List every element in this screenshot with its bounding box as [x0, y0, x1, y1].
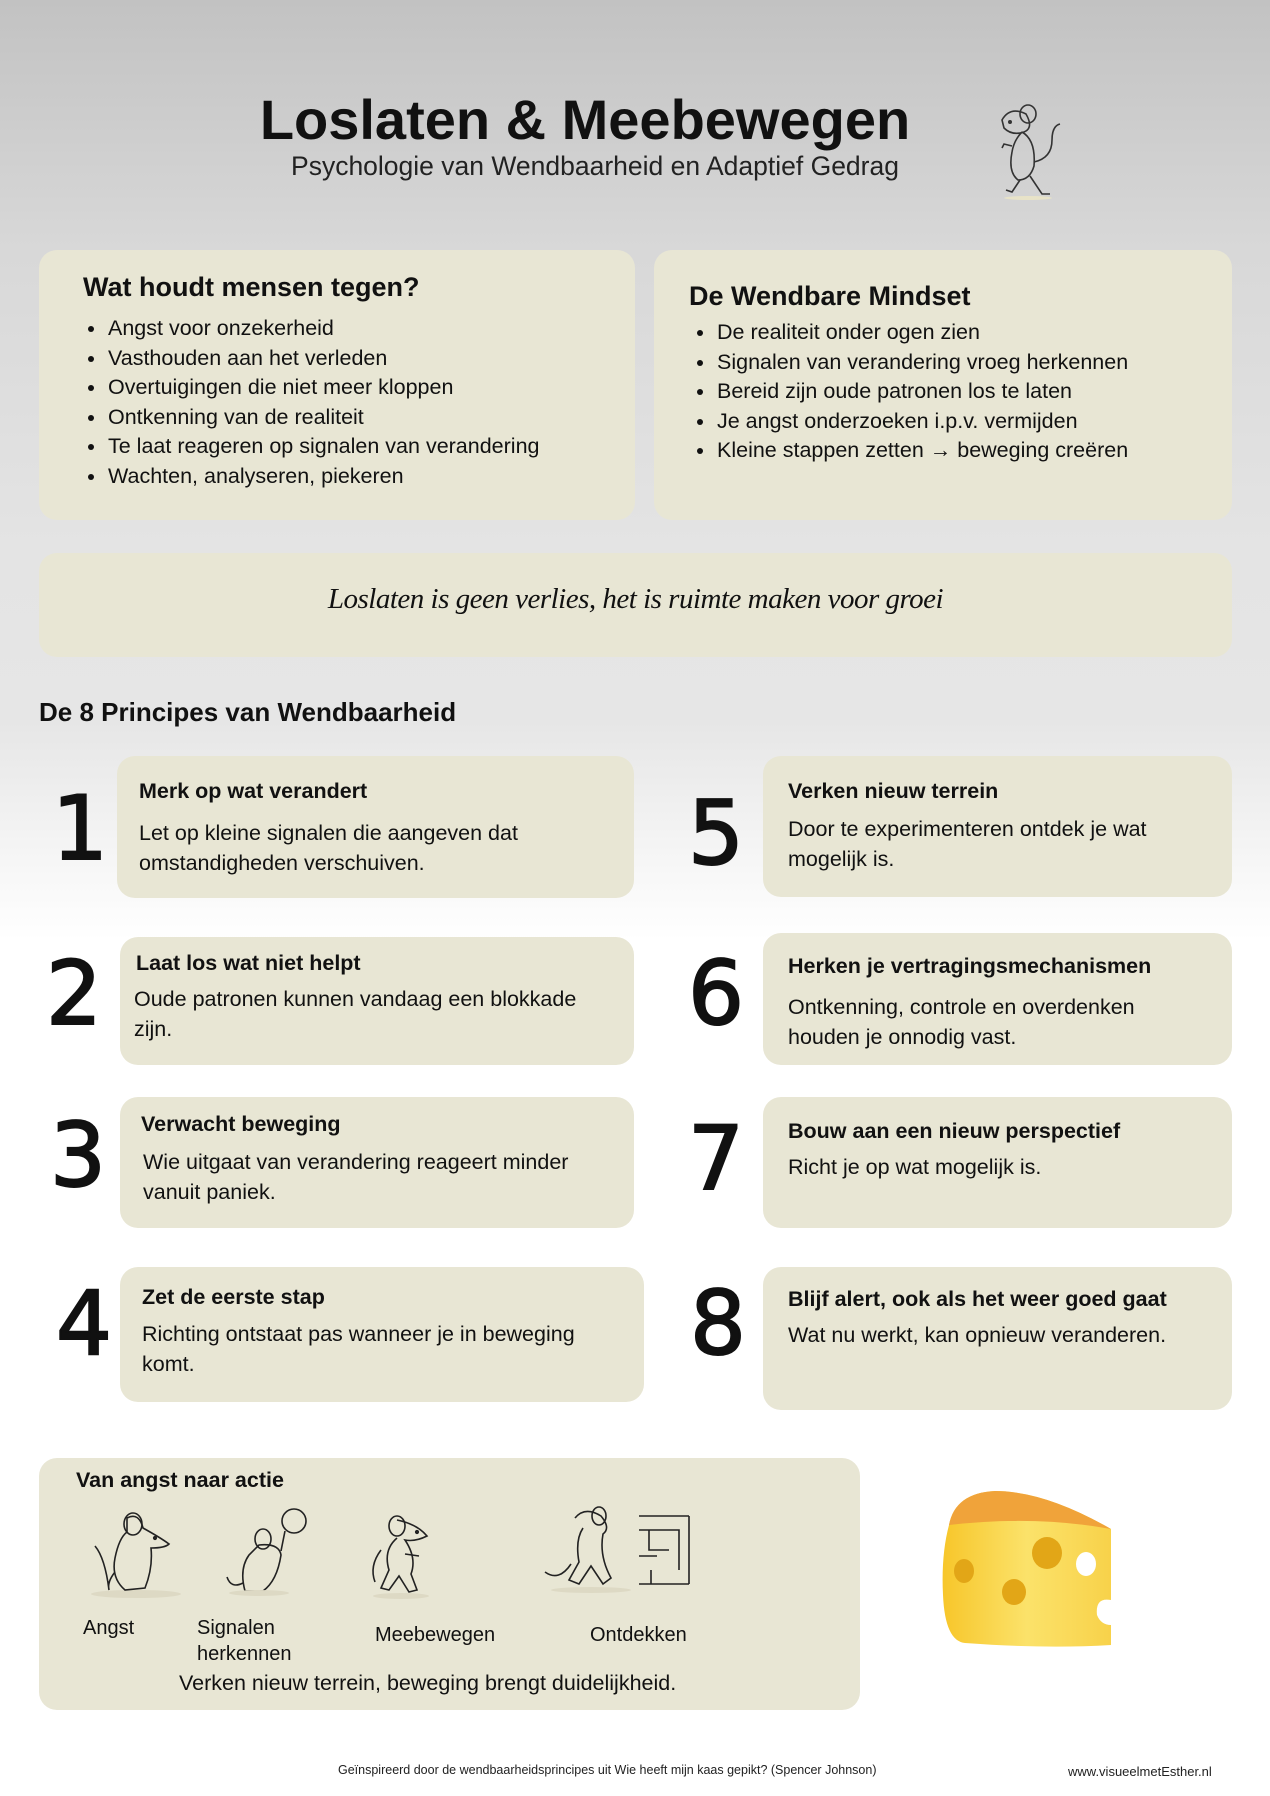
card 8 — [763, 1267, 1232, 1410]
card 1: Merk op wat verandert — [139, 779, 367, 803]
list: Wachten, analyseren, piekeren — [108, 464, 404, 488]
number 1: 1 — [52, 777, 108, 880]
list: De realiteit onder ogen zien — [717, 320, 980, 344]
card 2: Laat los wat niet helpt — [136, 951, 361, 975]
subtitle: Psychologie van Wendbaarheid en Adaptief Gedrag — [291, 151, 899, 181]
number 5: 5 — [688, 782, 744, 885]
card 5 — [763, 756, 1232, 897]
card 6 — [763, 933, 1232, 1065]
card 3 — [120, 1097, 634, 1228]
card 6: Ontkenning, controle en overdenken houden je onnodig vast. — [788, 995, 1135, 1049]
title: Loslaten & Meebewegen — [260, 88, 910, 151]
card 3: Verwacht beweging — [141, 1112, 341, 1136]
list: Ontkenning van de realiteit — [108, 404, 364, 428]
card 6: Herken je vertragingsmechanismen — [788, 954, 1151, 978]
list — [88, 316, 540, 488]
quote: Loslaten is geen verlies, het is ruimte maken voor groei — [328, 583, 943, 615]
icon: cheese — [942, 1491, 1111, 1647]
footer url: www.visueelmetEsther.nl — [1068, 1764, 1212, 1779]
list: Angst voor onzekerheid — [108, 316, 334, 340]
icon: walking mouse — [1001, 104, 1060, 200]
card 7 — [763, 1097, 1232, 1228]
card 2 — [120, 937, 634, 1065]
card 8: Wat nu werkt, kan opnieuw veranderen. — [788, 1323, 1166, 1347]
panel: from fear to action — [39, 1458, 860, 1710]
card 4: Zet de eerste stap — [142, 1285, 325, 1309]
number 2: 2 — [46, 942, 102, 1045]
card 1 — [117, 756, 634, 898]
heading: De Wendbare Mindset — [689, 281, 971, 311]
list: Te laat reageren op signalen van verandering — [108, 434, 540, 458]
list: Vasthouden aan het verleden — [108, 346, 387, 370]
panel: what holds people back — [39, 250, 635, 520]
number 4: 4 — [56, 1272, 112, 1375]
card 1: Let op kleine signalen die aangeven dat omstandigheden verschuiven. — [139, 821, 518, 875]
list: Je angst onderzoeken i.p.v. vermijden — [717, 408, 1078, 432]
card 3: Wie uitgaat van verandering reageert minder vanuit paniek. — [143, 1150, 568, 1204]
number 8: 8 — [690, 1272, 746, 1375]
panel: agile mindset — [654, 250, 1232, 520]
panel: from fear to action: herkennen — [197, 1643, 292, 1665]
heading: Wat houdt mensen tegen? — [83, 272, 420, 302]
list: Overtuigingen die niet meer kloppen — [108, 375, 453, 399]
list: Signalen van verandering vroeg herkennen — [717, 350, 1128, 374]
card 5: Door te experimenteren ontdek je wat mogelijk is. — [788, 817, 1147, 871]
labels: Angst — [83, 1617, 134, 1639]
caption: Verken nieuw terrein, beweging brengt duidelijkheid. — [179, 1671, 676, 1695]
footer credit: Geïnspireerd door de wendbaarheidsprincipes uit Wie heeft mijn kaas gepikt? (Spencer Johnson) — [338, 1763, 876, 1777]
section heading: De 8 Principes van Wendbaarheid — [39, 697, 456, 727]
card 4 — [120, 1267, 644, 1402]
card 8: Blijf alert, ook als het weer goed gaat — [788, 1287, 1167, 1311]
number 3: 3 — [50, 1104, 106, 1207]
list — [697, 320, 1128, 462]
card 7: Richt je op wat mogelijk is. — [788, 1155, 1041, 1179]
list: Kleine stappen zetten → beweging creëren — [717, 438, 1128, 462]
card 4: Richting ontstaat pas wanneer je in beweging komt. — [142, 1322, 575, 1376]
list: Bereid zijn oude patronen los te laten — [717, 379, 1072, 403]
card 5: Verken nieuw terrein — [788, 779, 998, 803]
panel: from fear to action: Ontdekken — [590, 1624, 687, 1646]
panel: from fear to action: Signalen — [197, 1617, 275, 1639]
icon: sitting mouse — [91, 1512, 181, 1598]
panel: from fear to action: Meebewegen — [375, 1624, 495, 1646]
number 6: 6 — [688, 942, 744, 1045]
card 2: Oude patronen kunnen vandaag een blokkade zijn. — [134, 987, 576, 1041]
icon: mouse with maze — [544, 1506, 690, 1593]
icon: walking mouse — [372, 1515, 429, 1599]
card 7: Bouw aan een nieuw perspectief — [788, 1119, 1120, 1143]
heading: Van angst naar actie — [76, 1468, 284, 1492]
quote box — [39, 553, 1232, 657]
number 7: 7 — [688, 1107, 744, 1210]
icon: mouse with magnifier — [226, 1508, 307, 1596]
